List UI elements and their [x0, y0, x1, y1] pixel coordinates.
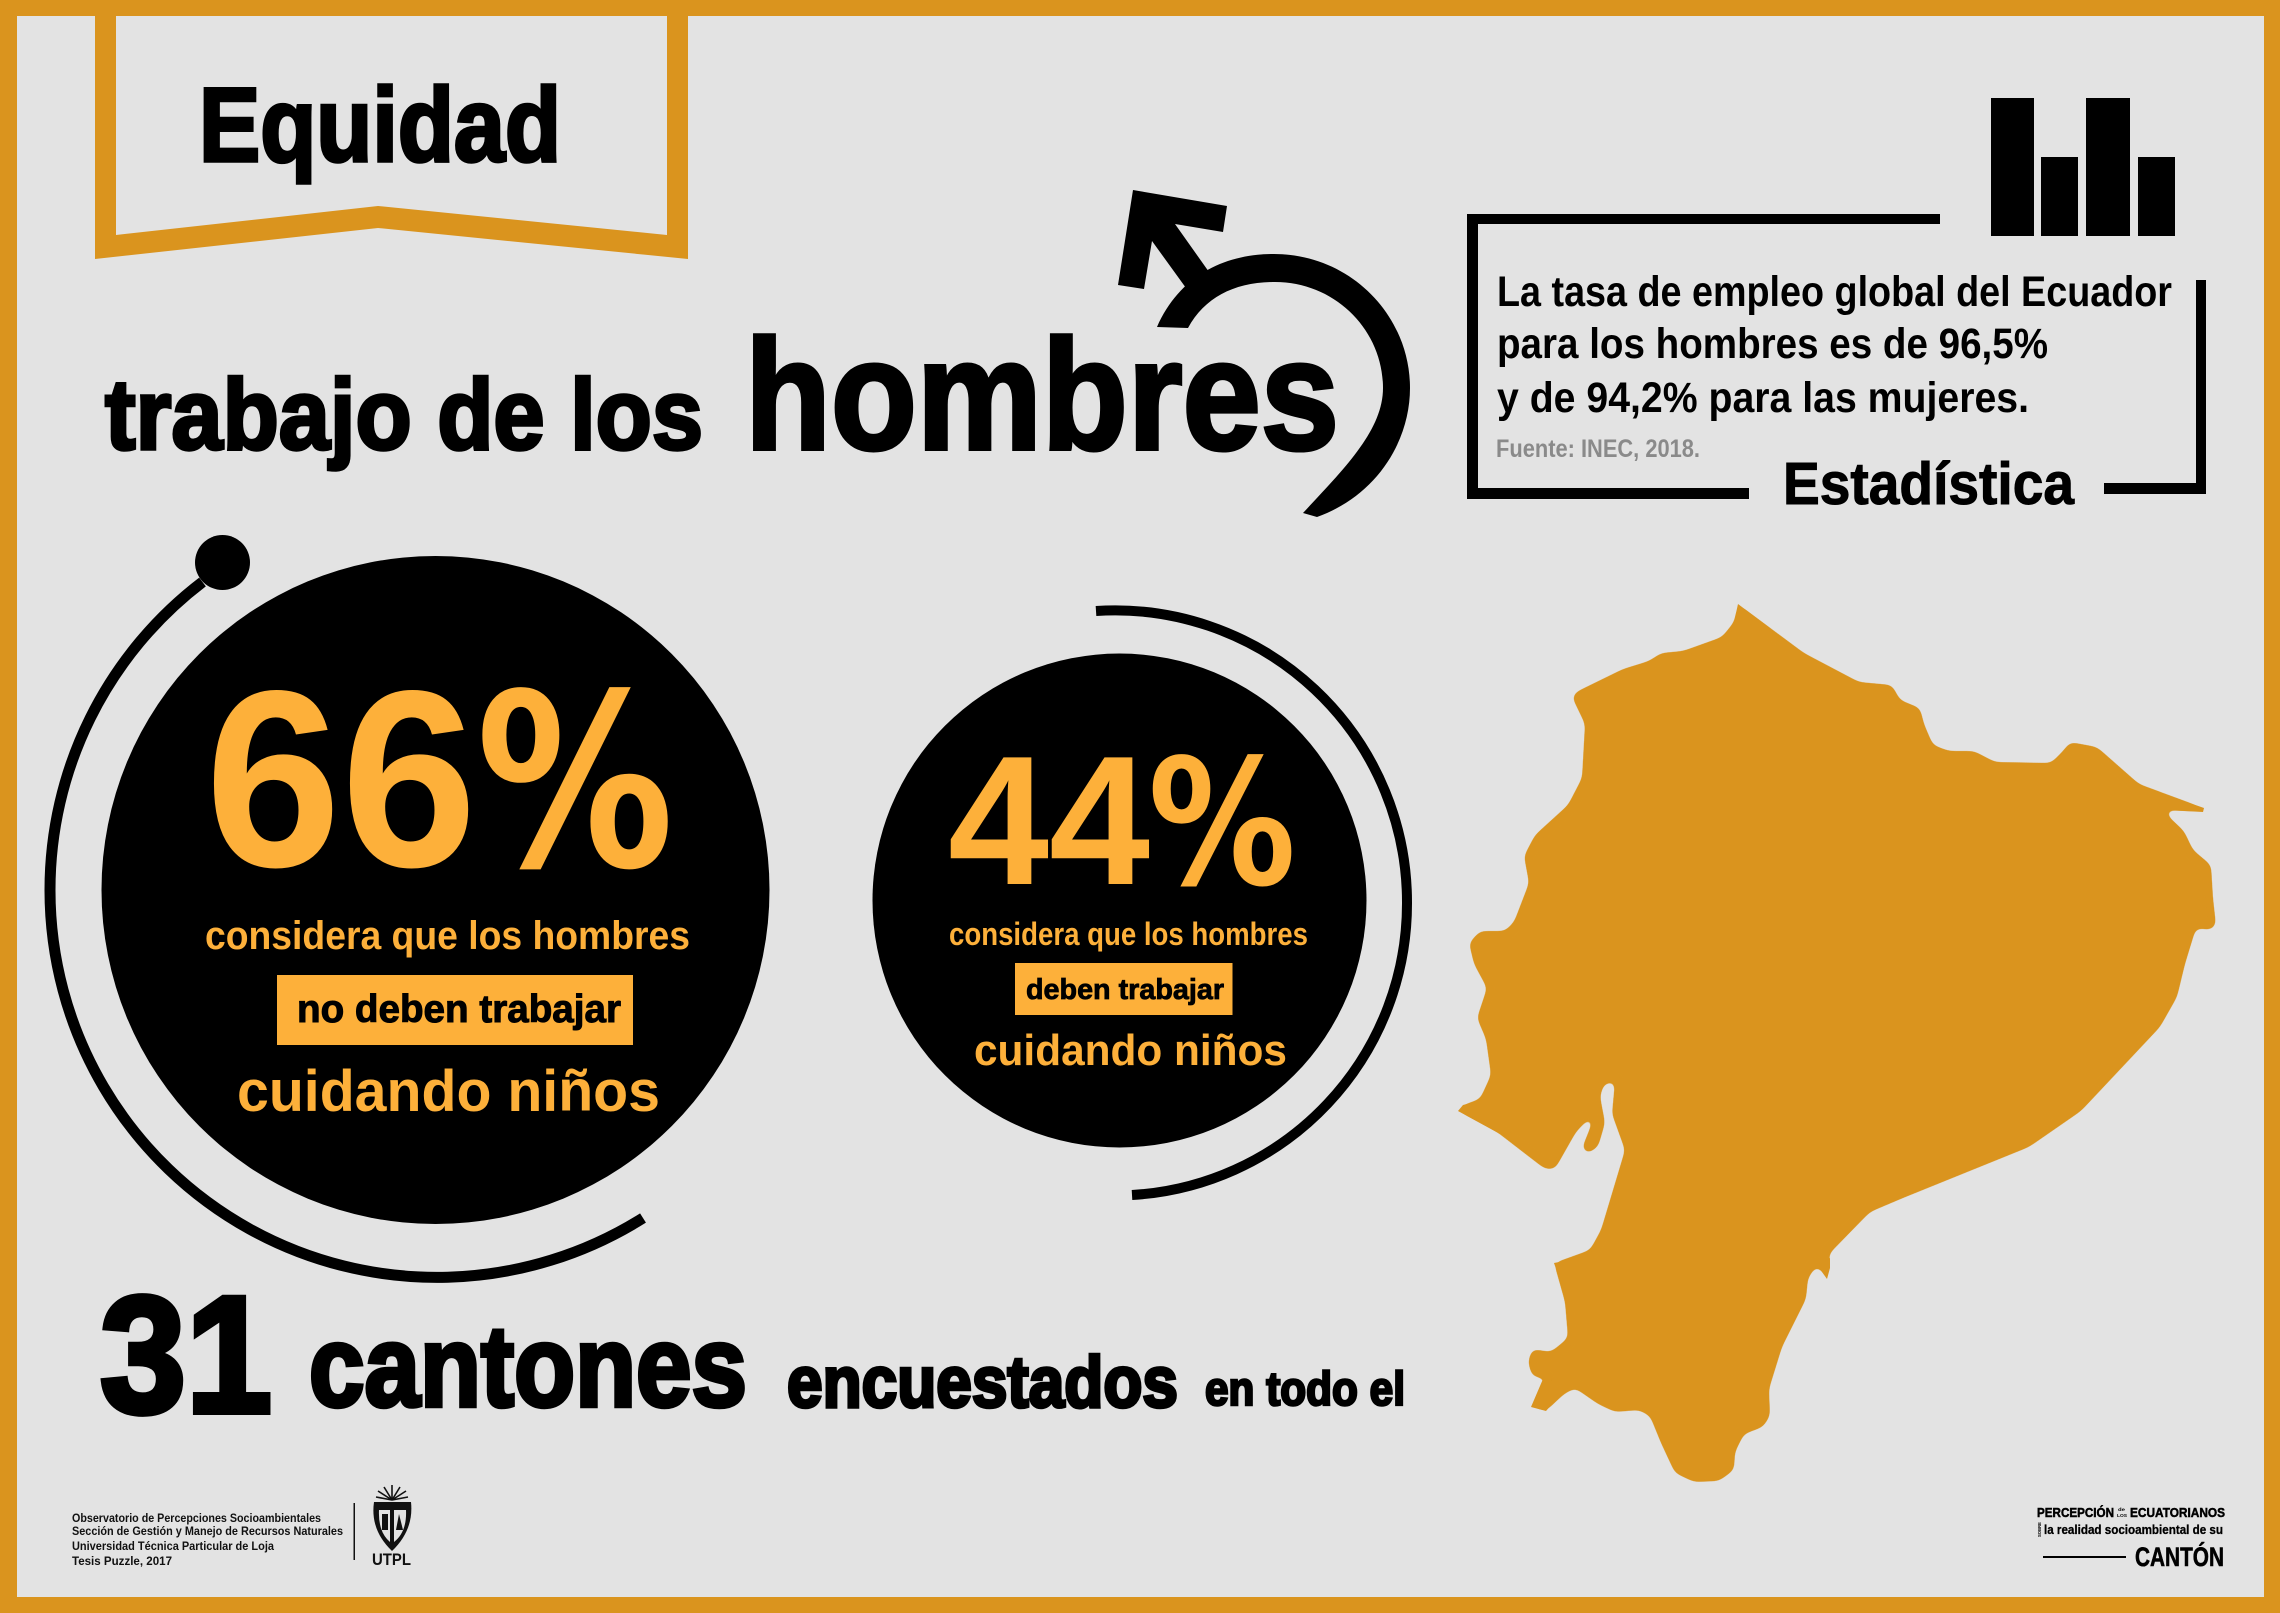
highlight: deben trabajar: [1015, 963, 1232, 1015]
footer: credits: Observatorio de Percepciones Socioambientales: [72, 1513, 321, 1525]
footer: project logo: [2037, 1505, 2225, 1572]
title ribbon: Equidad: [95, 16, 688, 259]
text: 31 cantones encuestados en todo el: [100, 1263, 1405, 1448]
source note: Fuente: INEC, 2018.: [1496, 435, 1700, 463]
highlight: deben trabajar: deben trabajar: [1026, 974, 1224, 1006]
footer: project logo: CANTÓN: [2135, 1541, 2224, 1572]
heading: Equidad: Equidad: [199, 67, 561, 184]
stat: 44%: [948, 717, 1296, 926]
footer: project logo: LOS: [2117, 1513, 2127, 1518]
logo text: UTPL: [372, 1550, 411, 1569]
footer: project logo: PERCEPCIÓN: [2037, 1505, 2114, 1520]
statistic text: para los hombres es de 96,5%: [1497, 320, 2048, 368]
icon: male symbol arc with arrow: [1118, 190, 1410, 517]
stat: 66%: %: [476, 642, 674, 923]
stat: 44%: 44: [948, 717, 1150, 923]
logo: UTPL crest: [354, 1485, 411, 1569]
highlight: no deben trabajar: [277, 975, 633, 1045]
heading: trabajo de los hombres: hombres: [745, 308, 1339, 483]
text: 31 cantones encuestados en todo el: cantones: [309, 1303, 747, 1431]
label: considera que los hombres: considera que los hombres: [949, 916, 1308, 952]
panel: 44 percent circle: [872, 610, 1407, 1195]
stat: 66%: 66: [205, 639, 477, 920]
statistic text: y de 94,2% para las mujeres.: [1497, 374, 2029, 422]
map: Ecuador: [1458, 604, 2216, 1482]
text: 31 cantones encuestados en todo el: 31: [100, 1263, 272, 1448]
footer: project logo: la realidad socioambiental de su: [2044, 1522, 2223, 1537]
statistic text: La tasa de empleo global del Ecuador: [1497, 268, 2172, 316]
label: cuidando niños: cuidando niños: [237, 1059, 660, 1124]
footer: project logo: ECUATORIANOS: [2130, 1505, 2225, 1520]
stat: 44%: %: [1148, 723, 1296, 926]
text: 31 cantones encuestados en todo el: encuestados: [787, 1343, 1178, 1423]
highlight: no deben trabajar: no deben trabajar: [297, 988, 621, 1031]
footer: credits: Sección de Gestión y Manejo de Recursos Naturales: [72, 1526, 343, 1538]
label: cuidando niños: cuidando niños: [974, 1026, 1287, 1075]
heading: trabajo de los hombres: trabajo de los: [105, 359, 703, 471]
footer: credits: [72, 1513, 343, 1568]
footer: credits: Tesis Puzzle, 2017: [72, 1556, 172, 1568]
panel: statistic box: [1467, 214, 2206, 517]
footer: project logo: SOBRE: [2037, 1522, 2042, 1537]
icon: bar chart: [1991, 98, 2175, 236]
heading: Estadística: Estadística: [1783, 451, 2075, 517]
label: considera que los hombres: considera que los hombres: [205, 914, 690, 958]
text: 31 cantones encuestados en todo el: en todo el: [1205, 1362, 1405, 1415]
heading: trabajo de los hombres: [105, 308, 1339, 483]
stat: 66%: [205, 639, 674, 923]
statistic text: [1497, 268, 2172, 422]
panel: 66 percent circle: [50, 535, 769, 1277]
orbit ring: [1096, 610, 1407, 1195]
footer: project logo: de: [2118, 1507, 2126, 1512]
orbit ring with dot: [50, 535, 643, 1277]
footer: credits: Universidad Técnica Particular de Loja: [72, 1541, 275, 1553]
